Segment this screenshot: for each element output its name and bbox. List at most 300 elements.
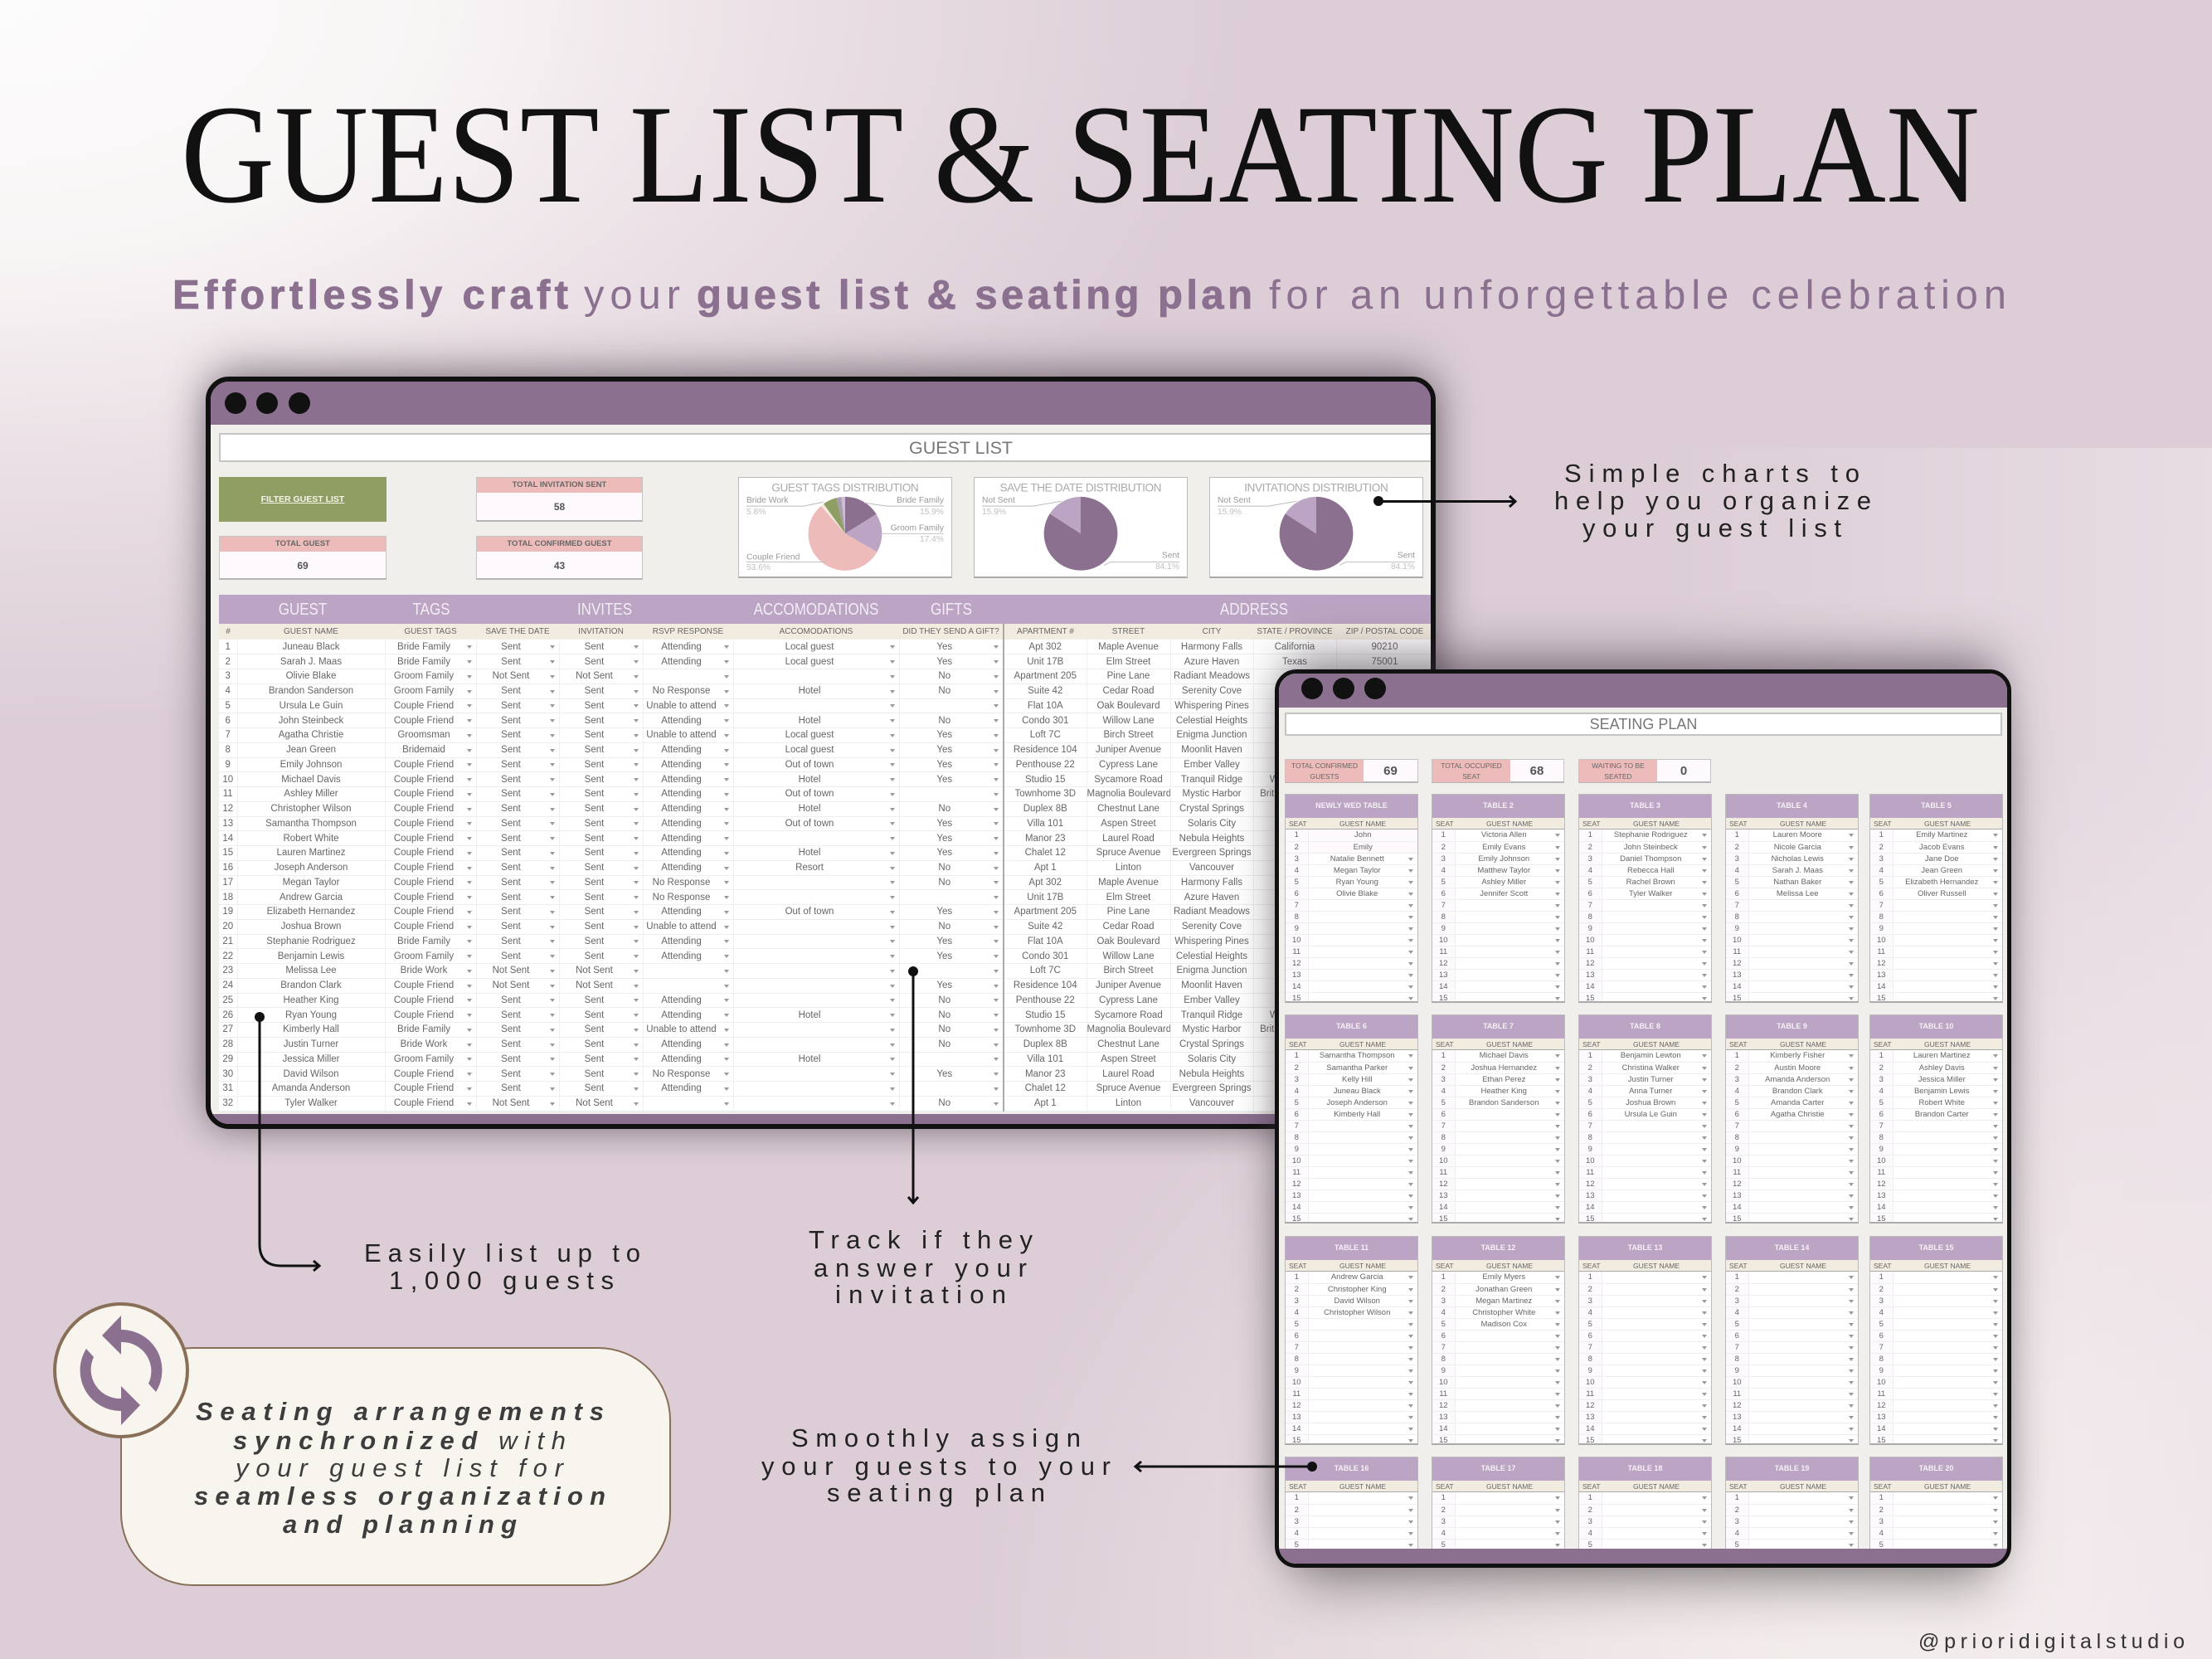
- table card: table 20: SEAT: [1874, 1482, 1892, 1491]
- chart: save the date distribution: Sent: [1162, 552, 1179, 561]
- table card: table 7: 1: [1441, 1051, 1446, 1060]
- table card: table 12: 15: [1439, 1435, 1448, 1445]
- table card: newly wed table: NEWLY WED TABLE: [1315, 801, 1388, 810]
- table: guest list rows: No: [938, 863, 950, 873]
- table: guest list rows: Couple Friend: [394, 1083, 454, 1093]
- table card: table 10: 8: [1879, 1133, 1884, 1141]
- table card: table 8: 15: [1586, 1214, 1595, 1223]
- stat: total guest: [219, 536, 386, 580]
- table card: newly wed table: 2: [1295, 843, 1299, 851]
- table card: newly wed table: 6: [1295, 889, 1299, 898]
- table: guest list rows: Washington: [1270, 1010, 1320, 1020]
- table card: table 4: 12: [1733, 959, 1742, 967]
- table card: table 3: 11: [1586, 947, 1594, 956]
- table: guest list rows: 1: [226, 642, 231, 652]
- table card: table 7: TABLE 7: [1483, 1022, 1514, 1030]
- arrow: guest count callout: [255, 1012, 319, 1271]
- table card: table 8: 11: [1586, 1168, 1594, 1176]
- table card: table 4: Nicole Garcia: [1774, 843, 1821, 851]
- table: guest list rows: Out of town: [785, 907, 834, 917]
- table: guest list rows: 5: [226, 701, 231, 711]
- table card: newly wed table: Megan Taylor: [1334, 866, 1381, 874]
- table card: table 8: Ursula Le Guin: [1625, 1110, 1677, 1118]
- table: guest list rows: Couple Friend: [394, 1010, 454, 1020]
- table: guest list rows: Celestial Heights: [1176, 951, 1247, 961]
- table: guest list rows: Not Sent: [493, 966, 529, 975]
- table card: table 13: 7: [1588, 1342, 1592, 1352]
- table card: table 10: 6: [1879, 1110, 1884, 1118]
- table: guest list rows: Unable to attend: [646, 730, 717, 740]
- table: guest list rows: Apt 302: [1028, 878, 1062, 888]
- table: guest list rows: Condo 301: [1022, 951, 1068, 961]
- table card: table 14: 8: [1735, 1354, 1739, 1364]
- table card: table 10: [1869, 1014, 2003, 1224]
- table: guest list rows: Sent: [501, 1083, 521, 1093]
- table card: table 10: 15: [1877, 1214, 1886, 1223]
- title: GUEST LIST & SEATING PLAN: [181, 76, 1980, 232]
- table card: table 2: 14: [1439, 982, 1448, 990]
- table card: table 2: 3: [1441, 854, 1446, 863]
- table card: table 11: 8: [1295, 1354, 1299, 1364]
- table card: table 8: 7: [1588, 1121, 1592, 1130]
- table card: newly wed table: 11: [1292, 947, 1300, 956]
- stat: total invitation sent: [476, 477, 643, 522]
- table card: table 11: 6: [1295, 1331, 1299, 1340]
- table: guest list rows: Penthouse 22: [1016, 760, 1075, 770]
- table: guest list rows: 90210: [1372, 642, 1398, 652]
- table: guest list rows: 21: [222, 937, 233, 946]
- table: guest list rows: Couple Friend: [394, 995, 454, 1005]
- table: guest list rows: Ryan Young: [285, 1010, 337, 1020]
- chart: guest tags distribution: 53.6%: [746, 563, 771, 572]
- table card: table 20: 4: [1879, 1528, 1884, 1538]
- chart: invitations distribution: Not Sent: [1218, 496, 1251, 505]
- table card: table 18: [1578, 1457, 1712, 1659]
- table: guest list rows: Hotel: [799, 848, 820, 858]
- table card: table 14: [1725, 1236, 1859, 1445]
- table: guest list rows: Hotel: [799, 775, 820, 785]
- text block: sync description: Seating arrangements: [196, 1397, 604, 1426]
- table: guest list rows: Sent: [501, 834, 521, 844]
- table card: table 5: Emily Martinez: [1916, 830, 1967, 839]
- table card: table 12: 1: [1441, 1272, 1446, 1282]
- table card: table 13: TABLE 13: [1628, 1243, 1662, 1252]
- chart: invitations distribution: Sent: [1398, 552, 1415, 561]
- stat: total invitation sent: TOTAL INVITATION SENT: [513, 480, 606, 489]
- table card: table 16: [1285, 1457, 1418, 1659]
- table: guest list rows: RSVP RESPONSE: [653, 627, 723, 636]
- table card: table 13: 8: [1588, 1354, 1592, 1364]
- table card: newly wed table: Olivie Blake: [1336, 889, 1378, 898]
- table: guest list rows: Out of town: [785, 819, 834, 829]
- table card: table 20: 6: [1879, 1551, 1884, 1561]
- table: guest list rows: Apt 1: [1034, 863, 1057, 873]
- table: guest list rows: Pine Lane: [1107, 671, 1150, 681]
- icon: sync arrows in circle: [53, 1302, 189, 1438]
- table: guest list rows: Hotel: [799, 686, 820, 696]
- table card: table 8: Anna Turner: [1629, 1087, 1672, 1095]
- table: guest list rows: Groom Family: [394, 671, 454, 681]
- table card: table 13: 4: [1588, 1307, 1592, 1317]
- table: guest list rows: No Response: [653, 686, 710, 696]
- table card: table 9: Amanda Carter: [1771, 1098, 1824, 1107]
- table card: table 3: 14: [1586, 982, 1595, 990]
- table card: table 6: 8: [1295, 1133, 1299, 1141]
- table card: table 5: 7: [1879, 901, 1884, 909]
- table card: table 11: 1: [1295, 1272, 1299, 1282]
- table: guest list rows: Villa 101: [1027, 1054, 1063, 1064]
- table: guest list rows: Unable to attend: [646, 701, 717, 711]
- table: guest list rows: Sent: [585, 951, 604, 961]
- table: guest list rows: Yes: [936, 745, 952, 755]
- table card: table 18: GUEST NAME: [1633, 1482, 1680, 1491]
- table: guest list rows: 17: [222, 878, 233, 888]
- table: guest list rows: Jean Green: [286, 745, 336, 755]
- table: guest list rows: Willow Lane: [1103, 716, 1155, 726]
- table: guest list rows: 18: [222, 893, 233, 902]
- table: guest list rows: Bride Work: [401, 1039, 447, 1049]
- table: guest list rows: British Columbia: [1260, 789, 1330, 799]
- table: guest list rows: Couple Friend: [394, 907, 454, 917]
- table: guest list rows: Sent: [501, 995, 521, 1005]
- table card: table 7: 8: [1441, 1133, 1446, 1141]
- table card: table 6: TABLE 6: [1336, 1022, 1367, 1030]
- table: guest list rows: Robert White: [283, 834, 339, 844]
- table: guest list rows: No: [938, 1098, 950, 1108]
- arrow: seating callout: [1135, 1462, 1317, 1472]
- table: guest list rows: Loft 7C: [1030, 730, 1061, 740]
- table card: table 13: 15: [1586, 1435, 1595, 1445]
- table card: table 18: 6: [1588, 1551, 1592, 1561]
- table card: table 2: 6: [1441, 889, 1446, 898]
- chart: guest tags distribution: 5.8%: [746, 508, 766, 517]
- table card: table 11: 4: [1295, 1307, 1299, 1317]
- decorative light wash on the right: [1659, 448, 2212, 1659]
- table card: table 18: SEAT: [1582, 1482, 1601, 1491]
- table card: table 17: [1432, 1457, 1565, 1659]
- chart: invitations distribution: 15.9%: [1218, 508, 1242, 517]
- table: guest list rows: Pine Lane: [1107, 907, 1150, 917]
- table: guest list rows: Washington: [1270, 775, 1320, 785]
- band: table section headings: INVITES: [577, 600, 632, 619]
- table card: table 15: 10: [1877, 1377, 1886, 1387]
- table: guest list rows: Moonlit Haven: [1181, 980, 1242, 990]
- table: guest list rows: Attending: [661, 863, 702, 873]
- table: guest list rows: Benjamin Lewis: [278, 951, 344, 961]
- table card: table 8: 8: [1588, 1133, 1592, 1141]
- table: guest list rows: Studio 15: [1025, 1010, 1066, 1020]
- chart: guest tags distribution: 15.9%: [920, 508, 944, 517]
- table card: table 14: 12: [1733, 1400, 1742, 1410]
- table: guest list rows: 6: [226, 716, 231, 726]
- table: guest list rows: Couple Friend: [394, 804, 454, 814]
- table: guest list rows: Couple Friend: [394, 775, 454, 785]
- table: guest list rows: Attending: [661, 937, 702, 946]
- callout: simple charts: Simple charts to: [1564, 459, 1860, 488]
- table: guest list rows: Sent: [501, 848, 521, 858]
- table: guest list rows: Stephanie Rodriguez: [266, 937, 356, 946]
- band: table section headings: ACCOMODATIONS: [754, 600, 878, 619]
- table: guest list rows: Emily Johnson: [280, 760, 342, 770]
- table: guest list rows: Flat 10A: [1028, 701, 1063, 711]
- table card: table 5: 13: [1877, 971, 1886, 979]
- subtitle: your: [584, 273, 680, 318]
- table: guest list rows: Couple Friend: [394, 716, 454, 726]
- table card: table 13: 11: [1586, 1389, 1594, 1399]
- table: guest list rows: No Response: [653, 893, 710, 902]
- table card: table 4: 1: [1735, 830, 1739, 839]
- chart: save the date distribution: Not Sent: [982, 496, 1015, 505]
- table: guest list rows: Sent: [585, 745, 604, 755]
- table card: table 5: Jean Green: [1921, 866, 1962, 874]
- stat: total occupied seat: TOTAL OCCUPIED SEAT: [1441, 761, 1502, 781]
- table card: table 8: TABLE 8: [1630, 1022, 1660, 1030]
- table: guest list rows: Jessica Miller: [282, 1054, 340, 1064]
- table: guest list rows: Sent: [585, 686, 604, 696]
- table card: table 19: 1: [1735, 1493, 1739, 1502]
- table card: table 9: 15: [1733, 1214, 1742, 1223]
- table: guest list rows: Laurel Road: [1102, 1069, 1155, 1079]
- table card: table 7: 15: [1439, 1214, 1448, 1223]
- table: guest list rows: 9: [226, 760, 231, 770]
- table card: table 10: Brandon Carter: [1915, 1110, 1969, 1118]
- table: guest list rows: Attending: [661, 907, 702, 917]
- table: guest list rows: Couple Friend: [394, 760, 454, 770]
- table: guest list rows: David Wilson: [283, 1069, 339, 1079]
- table card: table 10: 1: [1879, 1051, 1884, 1060]
- table: guest list rows: 26: [222, 1010, 233, 1020]
- table card: table 6: Juneau Black: [1334, 1087, 1381, 1095]
- table card: table 10: 2: [1879, 1063, 1884, 1072]
- table card: table 18: 4: [1588, 1528, 1592, 1538]
- chart: guest tags distribution: Couple Friend: [746, 553, 800, 562]
- table card: table 12: TABLE 12: [1481, 1243, 1515, 1252]
- table card: table 13: SEAT: [1582, 1262, 1601, 1270]
- table card: table 20: 5: [1879, 1540, 1884, 1550]
- table card: table 15: 15: [1877, 1435, 1886, 1445]
- table card: table 2: 13: [1439, 971, 1448, 979]
- table card: table 7: 4: [1441, 1087, 1446, 1095]
- table: guest list rows: Bride Family: [397, 1024, 450, 1034]
- stat: waiting to be seated: 0: [1680, 764, 1687, 778]
- table: guest list rows: Spruce Avenue: [1096, 848, 1160, 858]
- table: guest list rows: Yes: [936, 730, 952, 740]
- table: guest list rows: Sent: [501, 804, 521, 814]
- table: guest list rows: Manor 23: [1025, 1069, 1066, 1079]
- table card: table 9: [1725, 1014, 1859, 1224]
- table card: table 9: 3: [1735, 1075, 1739, 1083]
- table: guest list rows: Residence 104: [1014, 980, 1077, 990]
- table: guest list rows: Sent: [585, 863, 604, 873]
- table card: table 5: 1: [1879, 830, 1884, 839]
- table: guest list rows: Elizabeth Hernandez: [267, 907, 355, 917]
- table card: table 7: 2: [1441, 1063, 1446, 1072]
- stat: total confirmed guest: 43: [554, 560, 565, 572]
- table card: table 5: TABLE 5: [1921, 801, 1952, 810]
- panel: seating plan window: [1275, 669, 2011, 1568]
- table: guest list rows: Megan Taylor: [283, 878, 339, 888]
- table card: table 13: 12: [1586, 1400, 1595, 1410]
- table: guest list rows: APARTMENT #: [1017, 627, 1074, 636]
- table card: table 19: GUEST NAME: [1780, 1482, 1826, 1491]
- table card: table 6: 9: [1295, 1145, 1299, 1153]
- table card: table 7: Joshua Hernandez: [1471, 1063, 1537, 1072]
- table card: table 11: David Wilson: [1334, 1296, 1380, 1306]
- callout: easily list: 1,000 guests: [389, 1266, 614, 1295]
- table card: table 9: TABLE 9: [1777, 1022, 1807, 1030]
- table: guest list rows: Sent: [501, 1039, 521, 1049]
- table card: table 9: Brandon Clark: [1772, 1087, 1823, 1095]
- table card: newly wed table: John: [1354, 830, 1372, 839]
- table: guest list rows: 32: [222, 1098, 233, 1108]
- table card: newly wed table: [1285, 794, 1418, 1003]
- table card: table 12: 14: [1439, 1423, 1448, 1433]
- table card: table 12: Jonathan Green: [1475, 1284, 1532, 1294]
- table: guest list rows: Manor 23: [1025, 834, 1066, 844]
- table: guest list rows: Flat 10A: [1028, 937, 1063, 946]
- table card: table 12: 8: [1441, 1354, 1446, 1364]
- table card: table 9: GUEST NAME: [1780, 1040, 1826, 1048]
- table card: table 8: GUEST NAME: [1633, 1040, 1680, 1048]
- table: guest list rows: Not Sent: [576, 1098, 613, 1108]
- table card: table 10: 14: [1877, 1203, 1886, 1211]
- table card: table 11: GUEST NAME: [1339, 1262, 1386, 1270]
- table card: table 16: GUEST NAME: [1339, 1482, 1386, 1491]
- table: guest list rows: Couple Friend: [394, 834, 454, 844]
- table: guest list rows: Whispering Pines: [1174, 701, 1249, 711]
- table card: table 17: 2: [1441, 1505, 1446, 1515]
- table card: table 7: 5: [1441, 1098, 1446, 1107]
- table: guest list rows: Cypress Lane: [1099, 995, 1158, 1005]
- table card: table 4: 11: [1733, 947, 1741, 956]
- table: guest list rows: Magnolia Boulevard: [1087, 789, 1170, 799]
- table: guest list rows: 10: [222, 775, 233, 785]
- table: guest list rows: 4: [226, 686, 231, 696]
- table card: table 4: 8: [1735, 912, 1739, 921]
- table: guest list rows: Local guest: [785, 745, 834, 755]
- table card: table 9: Amanda Anderson: [1765, 1075, 1830, 1083]
- table card: table 4: Sarah J. Maas: [1772, 866, 1823, 874]
- chart: guest tags distribution: Bride Family: [897, 496, 945, 505]
- table card: table 14: TABLE 14: [1775, 1243, 1809, 1252]
- table: guest list rows: Whispering Pines: [1174, 937, 1249, 946]
- table: guest list rows: 27: [222, 1024, 233, 1034]
- table: guest list rows: Bride Family: [397, 657, 450, 667]
- table: guest list rows: Magnolia Boulevard: [1087, 1024, 1170, 1034]
- table: guest list rows: Sent: [585, 789, 604, 799]
- table card: table 3: 1: [1588, 830, 1592, 839]
- table card: table 5: Elizabeth Hernandez: [1905, 878, 1978, 886]
- table card: table 5: Jacob Evans: [1919, 843, 1964, 851]
- chart: save the date distribution: SAVE THE DATE DISTRIBUTION: [999, 482, 1162, 494]
- table card: table 2: 15: [1439, 994, 1448, 1002]
- table card: table 3: 7: [1588, 901, 1592, 909]
- table card: table 16: SEAT: [1289, 1482, 1307, 1491]
- table: guest list rows: Studio 15: [1025, 775, 1066, 785]
- table card: table 3: 8: [1588, 912, 1592, 921]
- table card: table 9: 14: [1733, 1203, 1742, 1211]
- table card: table 10: GUEST NAME: [1924, 1040, 1971, 1048]
- table: guest list rows: Unit 17B: [1027, 657, 1063, 667]
- table: guest list rows: 25: [222, 995, 233, 1005]
- table: guest list rows: Linton: [1116, 1098, 1141, 1108]
- table card: table 14: SEAT: [1729, 1262, 1748, 1270]
- table: guest list rows: Unable to attend: [646, 1024, 717, 1034]
- stat: total confirmed guests: [1285, 759, 1418, 783]
- table: guest list rows: Sent: [501, 937, 521, 946]
- table: guest list rows: Chestnut Lane: [1097, 804, 1159, 814]
- table: guest list rows: 19: [222, 907, 233, 917]
- table: guest list rows: Sycamore Road: [1094, 775, 1163, 785]
- heading: guest list: [219, 433, 1446, 462]
- table: guest list rows: Solaris City: [1188, 819, 1236, 829]
- table: guest list rows: Heather King: [283, 995, 339, 1005]
- heading: guest list: GUEST LIST: [909, 438, 1013, 458]
- table: guest list rows: Oak Boulevard: [1096, 701, 1160, 711]
- table card: table 6: 13: [1292, 1191, 1301, 1199]
- table card: table 14: 4: [1735, 1307, 1739, 1317]
- table: guest list rows: Couple Friend: [394, 922, 454, 932]
- table card: table 10: 10: [1877, 1156, 1886, 1165]
- table card: table 20: 1: [1879, 1493, 1884, 1502]
- table: guest list rows: Sent: [585, 775, 604, 785]
- table: guest list rows: Sent: [585, 1069, 604, 1079]
- table: guest list rows: Attending: [661, 1083, 702, 1093]
- table: guest list rows: Sent: [585, 642, 604, 652]
- table card: table 7: Heather King: [1481, 1087, 1527, 1095]
- table card: table 4: 6: [1735, 889, 1739, 898]
- table card: table 3: 9: [1588, 924, 1592, 932]
- table card: table 6: 7: [1295, 1121, 1299, 1130]
- table: guest list rows: Sent: [585, 657, 604, 667]
- table: guest list rows: Oak Boulevard: [1096, 937, 1160, 946]
- table card: table 17: TABLE 17: [1481, 1464, 1515, 1472]
- table card: table 4: GUEST NAME: [1780, 820, 1826, 828]
- callout: smoothly assign: your guests to your: [761, 1452, 1111, 1481]
- table: guest list rows: Juniper Avenue: [1096, 745, 1161, 755]
- table card: table 17: SEAT: [1436, 1482, 1454, 1491]
- table card: table 13: 1: [1588, 1272, 1592, 1282]
- table: guest list rows: Attending: [661, 745, 702, 755]
- heading: seating plan: SEATING PLAN: [1590, 716, 1697, 732]
- table: guest list rows: Mystic Harbor: [1183, 1024, 1241, 1034]
- table: guest list rows: Sent: [585, 1010, 604, 1020]
- table: guest list rows: John Steinbeck: [279, 716, 343, 726]
- table card: table 15: 13: [1877, 1412, 1886, 1422]
- table: guest list rows: Andrew Garcia: [280, 893, 343, 902]
- table: guest list rows: Evergreen Springs: [1172, 848, 1252, 858]
- table card: table 2: 7: [1441, 901, 1446, 909]
- table card: table 14: 5: [1735, 1319, 1739, 1329]
- table card: table 8: 4: [1588, 1087, 1592, 1095]
- table card: table 10: 4: [1879, 1087, 1884, 1095]
- table: guest list rows: Attending: [661, 1010, 702, 1020]
- table: guest list rows: Unable to attend: [646, 922, 717, 932]
- table card: table 13: 14: [1586, 1423, 1595, 1433]
- table: guest list rows: Sent: [501, 686, 521, 696]
- table: guest list rows: Loft 7C: [1030, 966, 1061, 975]
- table card: table 15: 3: [1879, 1296, 1884, 1306]
- table card: table 17: 3: [1441, 1516, 1446, 1526]
- table: guest list rows: Attending: [661, 775, 702, 785]
- table card: table 2: 1: [1441, 830, 1446, 839]
- table: guest list rows: Crystal Springs: [1179, 804, 1244, 814]
- table card: table 2: Ashley Miller: [1481, 878, 1526, 886]
- table card: table 17: 1: [1441, 1493, 1446, 1502]
- table card: table 10: 12: [1877, 1180, 1886, 1188]
- table: guest list rows: No: [938, 922, 950, 932]
- table card: table 10: Lauren Martinez: [1913, 1051, 1971, 1060]
